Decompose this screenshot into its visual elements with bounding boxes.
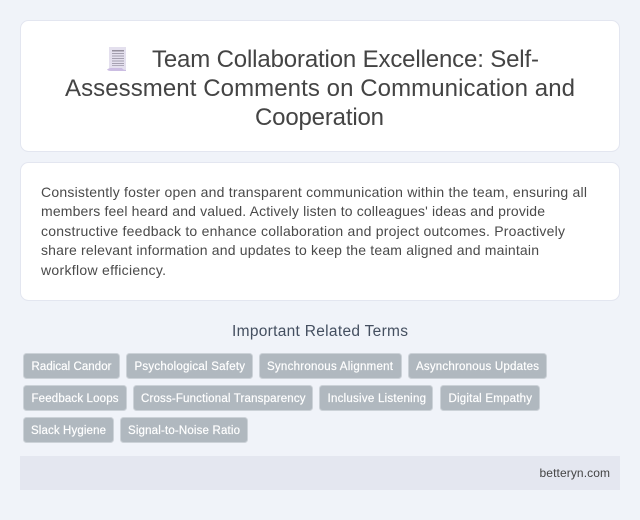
tag: Feedback Loops [24, 386, 126, 410]
panel: title card [20, 20, 620, 152]
tag: Asynchronous Updates [408, 354, 546, 378]
tag: Slack Hygiene: Slack Hygiene [31, 425, 106, 437]
tag: Inclusive Listening: Inclusive Listening [328, 393, 426, 405]
text block: self-assessment comment: constructive feedback to enhance collaboration and project outcomes. Proactively [41, 223, 565, 239]
heading: important related terms: Important Related Terms [232, 323, 408, 340]
tag: Asynchronous Updates: Asynchronous Updates [416, 361, 539, 373]
icon: scroll document [107, 47, 126, 71]
tag: Psychological Safety [126, 354, 252, 378]
tag: Signal-to-Noise Ratio [120, 418, 248, 442]
title: Cooperation [255, 104, 384, 131]
tag: Signal-to-Noise Ratio: Signal-to-Noise Ratio [128, 425, 240, 437]
tag: Synchronous Alignment [260, 354, 402, 378]
tag: Radical Candor [24, 354, 120, 378]
text block: self-assessment comment: workflow efficiency. [40, 262, 166, 278]
tag: Radical Candor: Radical Candor [32, 361, 112, 373]
text block: self-assessment comment [40, 184, 587, 278]
text block: self-assessment comment: members feel heard and valued. Actively listen to colleagues' ideas and provide [41, 203, 545, 219]
tag: Feedback Loops: Feedback Loops [32, 393, 119, 405]
footer credit: betteryn.com [540, 466, 610, 480]
text block: self-assessment comment: share relevant information and updates to keep the team aligned and maintain [41, 242, 539, 258]
title [65, 46, 575, 131]
footer bar [20, 456, 620, 490]
panel: related term tags [24, 354, 546, 442]
tag: Synchronous Alignment: Synchronous Alignment [267, 361, 394, 373]
title: Team Collaboration Excellence: Self- [152, 46, 539, 73]
tag: Slack Hygiene [24, 418, 114, 442]
tag: Digital Empathy [440, 386, 540, 410]
tag: Psychological Safety: Psychological Safety [134, 361, 245, 373]
text block: self-assessment comment: Consistently foster open and transparent communication within the team, ensuring all [41, 184, 587, 200]
panel: summary paragraph [20, 162, 620, 300]
tag: Inclusive Listening [320, 386, 432, 410]
tag: Cross-Functional Transparency [134, 386, 312, 410]
tag: Cross-Functional Transparency: Cross-Functional Transparency [141, 393, 306, 405]
tag: Digital Empathy: Digital Empathy [448, 393, 532, 405]
title: Assessment Comments on Communication and [65, 75, 575, 102]
